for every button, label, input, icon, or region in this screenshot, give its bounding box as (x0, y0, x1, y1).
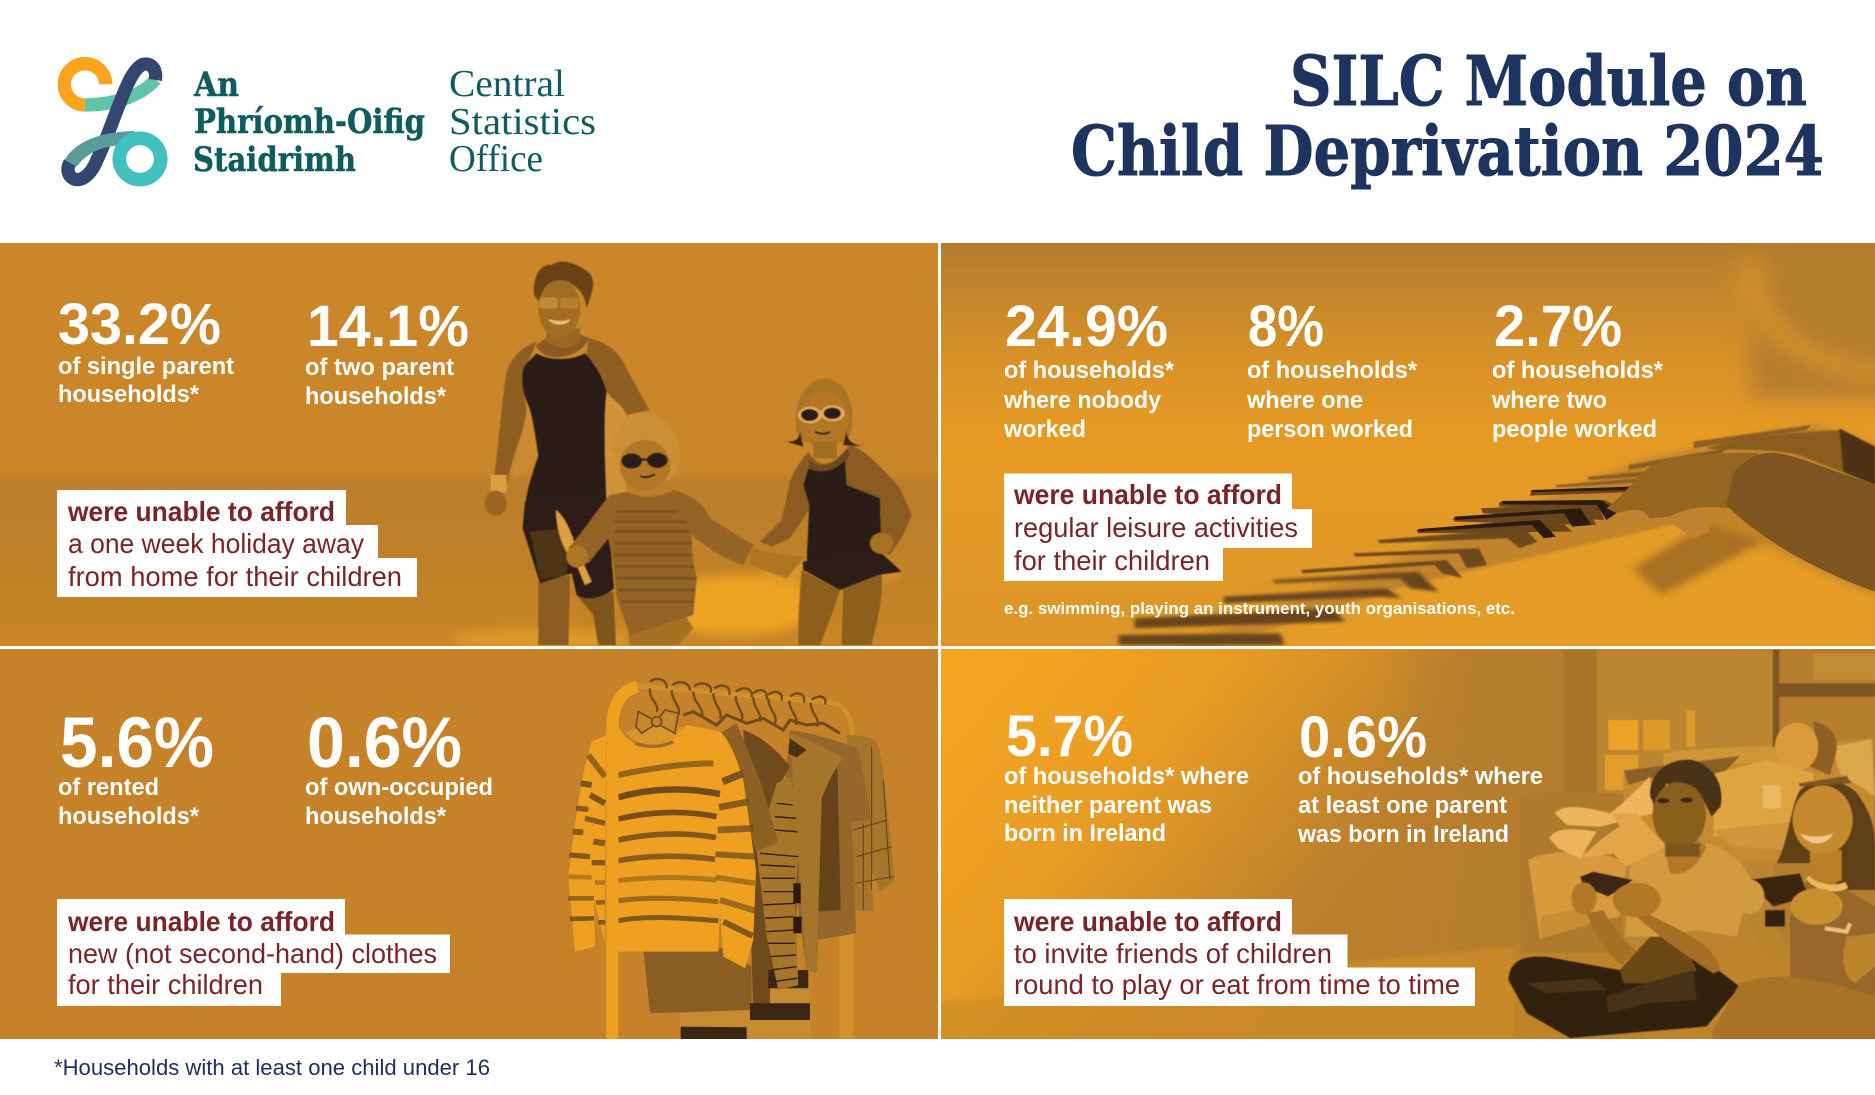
callout: holiday (57, 490, 417, 597)
panel: one week holiday (0, 243, 960, 667)
sofa (1519, 792, 1623, 953)
logo text: Irish name: Phríomh-Oifig (194, 102, 425, 142)
statistic: two parent (305, 294, 469, 410)
statistic: neither parent born in Ireland: 5.7% (1006, 704, 1133, 769)
callout: inviting friends: were unable to afford (1013, 906, 1282, 937)
statistic: one person worked: person worked (1247, 416, 1413, 443)
statistic: two people worked: where two (1491, 387, 1607, 414)
note: leisure examples: e.g. swimming, playing an instrument, youth organisations, etc. (1004, 599, 1515, 618)
checked shirt (847, 735, 895, 912)
statistic: one person worked: of households* (1247, 357, 1418, 384)
logo (64, 63, 596, 180)
logo text: English name (449, 63, 596, 180)
statistic: two people worked: 2.7% (1494, 294, 1622, 359)
statistic: neither parent born in Ireland: of households* where (1004, 763, 1249, 790)
statistic: two parent: households* (305, 383, 447, 410)
statistic: own-occupied: 0.6% (307, 704, 462, 783)
statistic: two people worked (1491, 294, 1664, 443)
girl (798, 570, 840, 645)
statistic: own-occupied: of own-occupied (305, 774, 493, 801)
back girl (1810, 722, 1837, 775)
man (538, 575, 570, 645)
panel: regular leisure activities (941, 243, 1875, 646)
logo text: English name: Statistics (449, 101, 596, 143)
photo: hand playing piano (916, 232, 1875, 688)
statistic: neither parent born in Ireland: born in Ireland (1004, 820, 1166, 847)
statistic: one person worked: where one (1246, 387, 1363, 414)
callout: clothes: for their children (68, 969, 263, 1000)
callout: inviting friends: to invite friends of children (1014, 938, 1332, 969)
statistic: at least one parent born in Ireland: of households* where (1298, 763, 1543, 790)
statistic: nobody worked: worked (1003, 416, 1086, 443)
statistic: rented: households* (58, 803, 200, 830)
panel: friends round to play (930, 649, 1875, 1050)
statistic: at least one parent born in Ireland: was born in Ireland (1297, 821, 1509, 848)
statistic: single parent: households* (58, 381, 200, 408)
statistic: two parent: 14.1% (307, 294, 469, 359)
statistic: two people worked: of households* (1492, 357, 1664, 384)
toddler (628, 612, 693, 645)
dark shirt (743, 730, 800, 1020)
keyboard top (1182, 423, 1875, 646)
footnote: *Households with at least one child under 16 (54, 1055, 490, 1080)
callout: inviting friends (1004, 899, 1475, 1006)
statistic: one person worked (1246, 294, 1418, 443)
boy jeans (1508, 954, 1739, 1039)
statistic: single parent: of single parent (58, 353, 234, 380)
callout: inviting friends: round to play or eat from time to time (1014, 969, 1460, 1000)
statistic: nobody worked: where nobody (1003, 387, 1162, 414)
callout: clothes: new (not second-hand) clothes (68, 938, 437, 969)
statistic: single parent: 33.2% (58, 292, 221, 357)
statistic: two parent: of two parent (305, 354, 454, 381)
statistic: rented (58, 704, 214, 830)
statistic: nobody worked (1003, 294, 1175, 443)
callout: holiday: were unable to afford (67, 496, 335, 527)
photo: clothes rail (568, 679, 895, 1043)
photo: children playing video games (930, 650, 1875, 1050)
logo text: English name: Central (449, 63, 565, 105)
tee shirts (783, 730, 872, 973)
striped dress (744, 988, 794, 1010)
statistic: two people worked: people worked (1492, 416, 1657, 443)
bow hanger (636, 710, 678, 733)
statistic: nobody worked: of households* (1004, 357, 1175, 384)
folded sleeve (720, 723, 778, 852)
logo text: Irish name: An (193, 65, 239, 105)
statistic: nobody worked: 24.9% (1005, 294, 1168, 359)
statistic: at least one parent born in Ireland (1297, 705, 1543, 848)
callout: holiday: a one week holiday away (68, 528, 364, 559)
callout: leisure activities: were unable to afford (1013, 479, 1282, 510)
girl (1712, 976, 1875, 1042)
sweater (606, 725, 756, 968)
statistic: neither parent born in Ireland: neither parent was (1004, 792, 1212, 819)
upright (612, 687, 637, 1043)
arm (1706, 430, 1875, 485)
striped cardigan (757, 777, 802, 990)
statistic: rented: 5.6% (60, 704, 214, 783)
photo: father and children on the beach (0, 262, 960, 667)
room (1380, 650, 1875, 947)
statistic: one person worked: 8% (1248, 294, 1324, 359)
statistic: rented: of rented (58, 774, 159, 801)
statistic: neither parent born in Ireland (1004, 704, 1249, 847)
statistic: at least one parent born in Ireland: 0.6% (1299, 705, 1427, 770)
skirt (643, 948, 752, 1013)
icon: CSO knot mark (64, 64, 161, 180)
statistic: single parent (58, 292, 234, 408)
callout: leisure activities: regular leisure activities (1014, 512, 1298, 543)
blanket (1528, 852, 1627, 938)
callout: holiday: from home for their children (68, 561, 402, 592)
toy spade (556, 510, 592, 585)
callout: clothes: were unable to afford (67, 906, 335, 937)
logo text: Irish name (193, 65, 425, 180)
callout: leisure activities: for their children (1014, 545, 1210, 576)
panel: new clothes (0, 649, 938, 1043)
statistic: own-occupied: households* (305, 803, 447, 830)
callout: leisure activities (1004, 474, 1312, 581)
rail (637, 686, 853, 735)
boy (1625, 843, 1752, 937)
logo text: English name: Office (449, 138, 543, 180)
statistic: at least one parent born in Ireland: at least one parent (1298, 792, 1507, 819)
callout: clothes (57, 899, 450, 1006)
statistic: own-occupied (305, 704, 493, 830)
title (1071, 42, 1824, 192)
logo text: Irish name: Staidrimh (193, 140, 356, 180)
hooks (650, 679, 826, 727)
